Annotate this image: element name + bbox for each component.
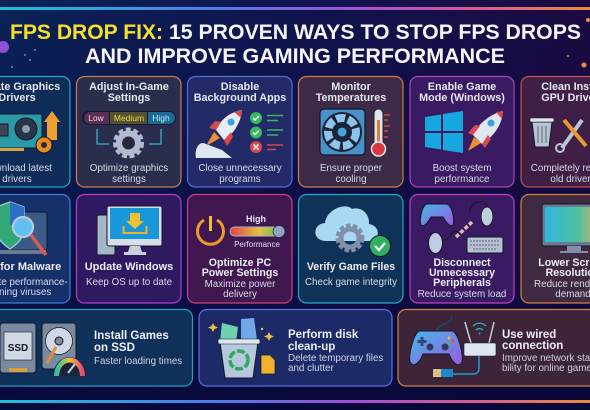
panel: disable background apps: Close unnecessary [198,163,282,174]
panel: perform disk clean-up: Perform disk [288,329,359,341]
icon: rocket [196,110,242,158]
panel: enable game mode: Mode (Windows) [419,92,505,104]
performance slider: Performance [234,240,280,249]
panel: perform disk clean-up: and clutter [288,363,334,374]
panel: perform disk clean-up [199,310,392,386]
panel: monitor temperatures: Monitor [331,81,372,93]
panel: enable game mode: Enable Game [428,81,496,93]
panel: update graphics drivers: drivers [2,174,32,185]
panel: lower screen resolution [521,194,590,303]
panel: disable background apps: Background Apps [194,92,286,104]
panel: enable game mode [410,76,514,187]
icon: router and cable [433,322,496,377]
panel: adjust in-game settings [76,76,181,187]
icon: hard drive [42,323,76,369]
panel: disable background apps [188,76,292,187]
icon: cloud, gear and check [315,206,390,256]
icon: power button [197,216,224,244]
panel: optimize pc power settings: Optimize PC [209,257,272,269]
panel: disconnect unnecessary peripherals: Reduce system load [418,289,506,300]
quality selector: Medium [114,113,144,123]
panel: verify game files: Check game integrity [305,277,397,288]
icon: recycle bin with files [208,318,275,378]
panel: update graphics drivers [0,76,70,187]
panel: disable background apps: programs [219,174,261,185]
panel: update windows: Keep OS up to date [86,277,173,288]
performance slider: High [246,214,266,224]
icon: gear [97,129,161,156]
title [10,21,581,68]
panel: disconnect unnecessary peripherals [410,194,514,303]
panel: disconnect unnecessary peripherals: Unnecessary [429,267,495,279]
icon: computer with download [97,206,162,255]
panel: use wired connection: Use wired [502,329,556,341]
panel: monitor temperatures [298,76,403,187]
panel: adjust in-game settings: settings [112,174,146,185]
panel: use wired connection: connection [502,340,563,352]
icon: monitor [542,204,590,253]
panel: optimize pc power settings: Maximize power [205,279,276,290]
performance slider [230,214,285,249]
panel: perform disk clean-up: clean-up [288,341,335,353]
panel: install games on ssd [0,310,192,386]
icon: shield and magnifier [0,202,47,255]
quality selector: Low [88,113,105,123]
panel: optimize pc power settings: Power Settings [202,267,278,279]
panel: enable game mode: performance [434,174,490,185]
icon: checklist [250,112,283,153]
panel: adjust in-game settings: Optimize graphics [90,163,168,174]
panel: install games on ssd: Install Games [94,330,169,342]
icon: ssd: SSD [8,343,28,354]
decorative sparkles [0,18,590,68]
panel: monitor temperatures: Temperatures [316,92,386,104]
icon: ssd [0,323,36,373]
panel: verify game files [298,194,403,303]
icon: thermometer [372,109,390,156]
panel: disable background apps: Disable [221,81,259,93]
icon: cooling fan [320,109,365,155]
icon: gamepad [410,316,462,365]
icon: trash can [530,118,554,147]
panel: disconnect unnecessary peripherals: Peripherals [433,277,491,289]
icon: graphics card [0,111,60,153]
panel: optimize pc power settings [188,194,292,303]
panel: install games on ssd: Faster loading times [94,356,182,367]
quality selector: High [152,113,170,123]
icon: windows logo [425,111,463,153]
title: FPS DROP FIX: [10,21,163,44]
title: 15 PROVEN WAYS TO STOP FPS DROPS [169,21,581,44]
panel: optimize pc power settings: delivery [223,289,257,300]
bottom accent line [0,400,590,403]
icon: rocket [468,111,503,151]
panel: update windows [76,194,181,303]
panel: scan for malware [0,194,70,303]
panel: clean install gpu drivers [521,76,590,187]
panel: adjust in-game settings: Settings [108,92,150,104]
panel: install games on ssd: on SSD [94,342,135,354]
title: AND IMPROVE GAMING PERFORMANCE [85,45,505,68]
panel: adjust in-game settings: Adjust In-Game [89,81,169,93]
icon: wrench and screwdriver [556,120,586,152]
top accent line [0,7,590,10]
panel: perform disk clean-up: Delete temporary files [288,353,383,364]
panel: monitor temperatures: Ensure proper [320,163,383,174]
panel: enable game mode: Boost system [433,163,491,174]
icon: gamepad, mice, cable and keyboard [420,201,503,254]
icon: speed gauge [53,357,86,376]
panel: update windows: Update Windows [85,261,173,273]
panel: verify game files: Verify Game Files [307,261,395,273]
panel: lower screen resolution: demand [555,289,590,300]
panel: monitor temperatures: cooling [335,174,367,185]
panel: disconnect unnecessary peripherals: Disconnect [433,257,491,269]
panel: use wired connection [398,310,590,386]
quality selector [82,111,176,125]
